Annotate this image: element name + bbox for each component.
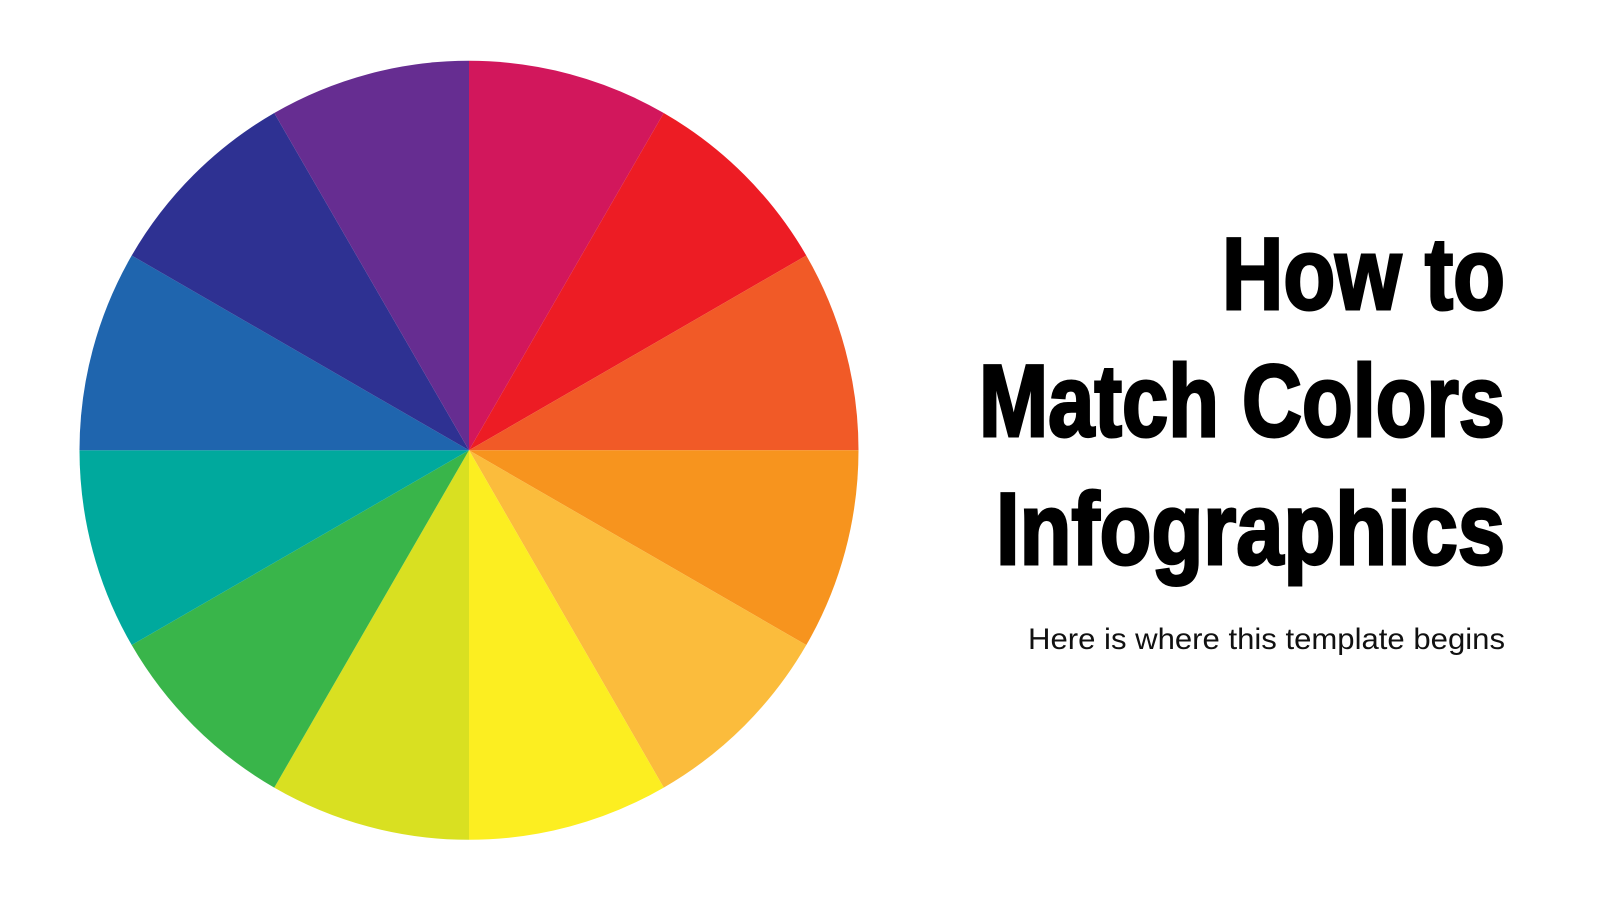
- title: How to: [1222, 217, 1505, 331]
- title: Infographics: [996, 472, 1505, 586]
- color wheel: [80, 61, 858, 840]
- title: [979, 217, 1505, 586]
- subtitle: Here is where this template begins: [1028, 623, 1505, 656]
